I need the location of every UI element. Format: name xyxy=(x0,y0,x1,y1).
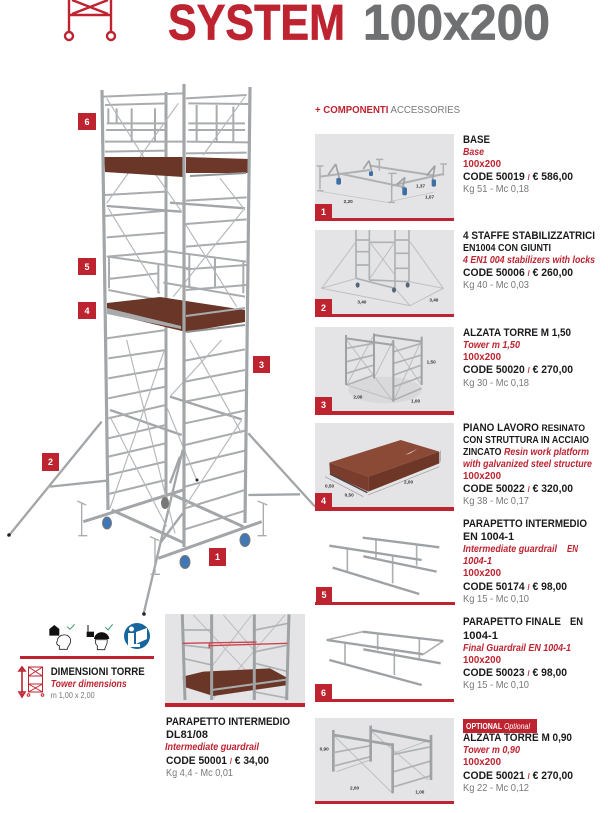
base drawing: 1,37 xyxy=(416,183,425,188)
text: stabilizers xyxy=(462,230,595,291)
text: tower m 1.50: CODE 50020 / € 270,00 xyxy=(463,364,573,376)
icon: head with house xyxy=(49,624,75,649)
text: tower m 0.90: 100x200 xyxy=(463,757,501,768)
panel 3: tower m 1.50 xyxy=(315,327,454,415)
platform drawing: 0,50 xyxy=(325,484,334,489)
panel 5: intermediate guardrail xyxy=(315,538,455,605)
text: tower m 1.50: Tower m 1,50 xyxy=(463,340,520,351)
stabilizers drawing: 3,40 xyxy=(357,300,367,305)
marker 4 xyxy=(78,302,96,319)
panel 7: tower m 0.90 xyxy=(315,718,454,804)
text: intermediate guardrail DL81/08: PARAPETTO INTERMEDIO xyxy=(166,716,290,728)
marker 3: 3 xyxy=(259,360,264,370)
panel 4: work platform xyxy=(315,423,454,511)
text: stabilizers: EN1004 CON GIUNTI xyxy=(463,243,551,254)
panel: intermediate guardrail DL81/08 xyxy=(165,614,305,707)
panel 4: work platform: 4 xyxy=(321,496,326,506)
platform drawing xyxy=(325,440,441,498)
marker 6 xyxy=(78,113,96,130)
text: intermediate guardrail: CODE 50174 / € 98,00 xyxy=(463,581,567,593)
tower: top platform xyxy=(104,157,249,177)
main tower illustration xyxy=(7,84,315,616)
text: tower dimensions xyxy=(51,666,145,700)
text: stabilizers: Kg 40 - Mc 0,03 xyxy=(463,279,529,291)
text: work platform: 100x200 xyxy=(463,471,501,482)
text: intermediate guardrail DL81/08: CODE 50001 / € 34,00 xyxy=(166,755,269,767)
tower section 0.90 drawing: 1,00 xyxy=(415,790,425,795)
marker 1: 1 xyxy=(215,552,220,562)
platform drawing: 0,50 xyxy=(345,493,354,498)
text: final guardrail: 1004-1 xyxy=(463,630,498,642)
marker 6: 6 xyxy=(84,117,90,127)
text: stabilizers: 4 STAFFE STABILIZZATRICI xyxy=(463,230,595,242)
text: work platform: CON STRUTTURA IN ACCIAIO xyxy=(463,435,589,446)
text: tower m 0.90: CODE 50021 / € 270,00 xyxy=(463,770,573,782)
tower: wheels xyxy=(7,478,250,616)
tower section drawing: 1,00 xyxy=(411,399,420,404)
panel 1: base: 1 xyxy=(321,207,326,217)
tower: base rails xyxy=(83,490,262,558)
tower section drawing: 1,50 xyxy=(427,359,436,364)
text: final guardrail: 100x200 xyxy=(463,655,501,666)
text: work platform: PIANO LAVORO RESINATO xyxy=(463,422,585,434)
text: final guardrail xyxy=(463,616,583,691)
text: work platform: ZINCATO Resin work platform xyxy=(463,447,589,458)
panel 5: intermediate guardrail: 5 xyxy=(321,590,327,600)
section heading: accessories: + COMPONENTI ACCESSORIES xyxy=(315,105,460,116)
text: tower dimensions: Tower dimensions xyxy=(51,679,127,690)
text: tower m 1.50: ALZATA TORRE M 1,50 xyxy=(463,327,571,339)
panel 3: tower m 1.50: 3 xyxy=(321,400,326,410)
marker 2: 2 xyxy=(48,457,53,467)
tower section drawing: 2,00 xyxy=(353,395,363,400)
text: tower m 1.50: 100x200 xyxy=(463,352,501,363)
text: tower dimensions: m 1,00 x 2,00 xyxy=(51,691,95,700)
text: work platform: CODE 50022 / € 320,00 xyxy=(463,483,573,495)
text: tower dimensions: DIMENSIONI TORRE xyxy=(51,666,145,678)
tower: outriggers xyxy=(77,501,267,574)
final guardrail drawing xyxy=(327,632,443,685)
guardrail drawing xyxy=(329,538,439,594)
text: intermediate guardrail: EN xyxy=(567,544,579,555)
divider xyxy=(20,656,154,659)
base drawing: 2,20 xyxy=(344,199,353,204)
title xyxy=(168,0,550,50)
text: intermediate guardrail: Intermediate guardrail xyxy=(463,544,557,555)
panel 6: final guardrail xyxy=(315,632,454,702)
icon: head with hard hat xyxy=(87,624,113,650)
tower section drawing xyxy=(346,333,436,404)
marker 5: 5 xyxy=(84,262,90,272)
icon: tower logo xyxy=(65,0,115,40)
tower section 0.90 drawing: 0,90 xyxy=(320,747,329,752)
badge: optional: OPTIONAL Optional xyxy=(466,722,530,731)
badge: optional xyxy=(463,719,537,733)
text: intermediate guardrail: Kg 15 - Mc 0,10 xyxy=(463,593,529,605)
text: tower m 0.90: ALZATA TORRE M 0,90 xyxy=(463,732,572,744)
tower: lower rungs xyxy=(108,340,245,533)
text: intermediate guardrail DL81/08: Kg 4,4 - Mc 0,01 xyxy=(166,767,233,779)
text: final guardrail: EN xyxy=(570,616,583,628)
tower: lower structure xyxy=(9,397,315,615)
text: tower m 0.90: Tower m 0,90 xyxy=(463,745,520,756)
stabilizers drawing xyxy=(322,230,443,306)
text: tower m 0.90 xyxy=(463,732,573,794)
tower: upper frame rungs xyxy=(103,93,248,338)
marker 1 xyxy=(209,548,226,566)
icon: read manual xyxy=(124,623,150,649)
icon: tower dimensions xyxy=(19,667,44,697)
tower: front posts xyxy=(102,84,250,547)
stabilizers drawing: 3,40 xyxy=(429,298,439,303)
platform drawing: 2,00 xyxy=(404,480,413,485)
detail tower drawing xyxy=(182,614,289,700)
text: base: CODE 50019 / € 586,00 xyxy=(463,171,573,183)
text: stabilizers: CODE 50006 / € 260,00 xyxy=(463,267,573,279)
text: base: Kg 51 - Mc 0,18 xyxy=(463,183,529,195)
text: work platform: Kg 38 - Mc 0,17 xyxy=(463,495,529,507)
panel 2: stabilizers: 2 xyxy=(321,303,326,313)
text: base: Base xyxy=(463,147,484,158)
text: intermediate guardrail DL81/08: Intermediate guardrail xyxy=(165,742,259,753)
panel 6: final guardrail: 6 xyxy=(321,688,326,698)
tower: far post xyxy=(164,92,168,507)
panel 2: stabilizers xyxy=(315,230,454,317)
text: work platform: with galvanized steel structure xyxy=(463,459,592,470)
text: intermediate guardrail xyxy=(463,518,587,605)
marker 2 xyxy=(42,453,59,471)
marker 4: 4 xyxy=(84,306,90,316)
tower section 0.90 drawing xyxy=(320,726,431,795)
text: intermediate guardrail: PARAPETTO INTERMEDIO xyxy=(463,518,587,530)
text: tower m 1.50: Kg 30 - Mc 0,18 xyxy=(463,377,529,389)
text: intermediate guardrail DL81/08: DL81/08 xyxy=(166,729,208,741)
marker 5 xyxy=(78,258,96,275)
panel 1: base xyxy=(315,134,454,221)
text: intermediate guardrail: 100x200 xyxy=(463,568,501,579)
text: intermediate guardrail: EN 1004-1 xyxy=(463,531,514,543)
text: final guardrail: CODE 50023 / € 98,00 xyxy=(463,667,567,679)
tower: lower braces xyxy=(110,397,242,543)
text: final guardrail: PARAPETTO FINALE xyxy=(463,616,561,628)
text: tower m 0.90: Kg 22 - Mc 0,12 xyxy=(463,782,529,794)
tower section 0.90 drawing: 2,00 xyxy=(350,785,359,790)
text: base: 100x200 xyxy=(463,159,501,170)
text: intermediate guardrail: 1004-1 xyxy=(463,556,492,567)
marker 3 xyxy=(253,356,270,373)
tower: middle platform xyxy=(107,297,245,332)
base drawing: 1,07 xyxy=(425,195,434,200)
tower: stabilizers xyxy=(9,422,315,615)
text: tower m 1.50 xyxy=(463,327,573,389)
text: work platform xyxy=(463,422,592,507)
text: base: BASE xyxy=(463,134,490,146)
text: base xyxy=(463,134,573,195)
text: intermediate guardrail DL81/08 xyxy=(165,716,290,779)
text: final guardrail: Kg 15 - Mc 0,10 xyxy=(463,679,529,691)
base drawing xyxy=(317,159,447,204)
text: final guardrail: Final Guardrail EN 1004-1 xyxy=(463,643,571,654)
